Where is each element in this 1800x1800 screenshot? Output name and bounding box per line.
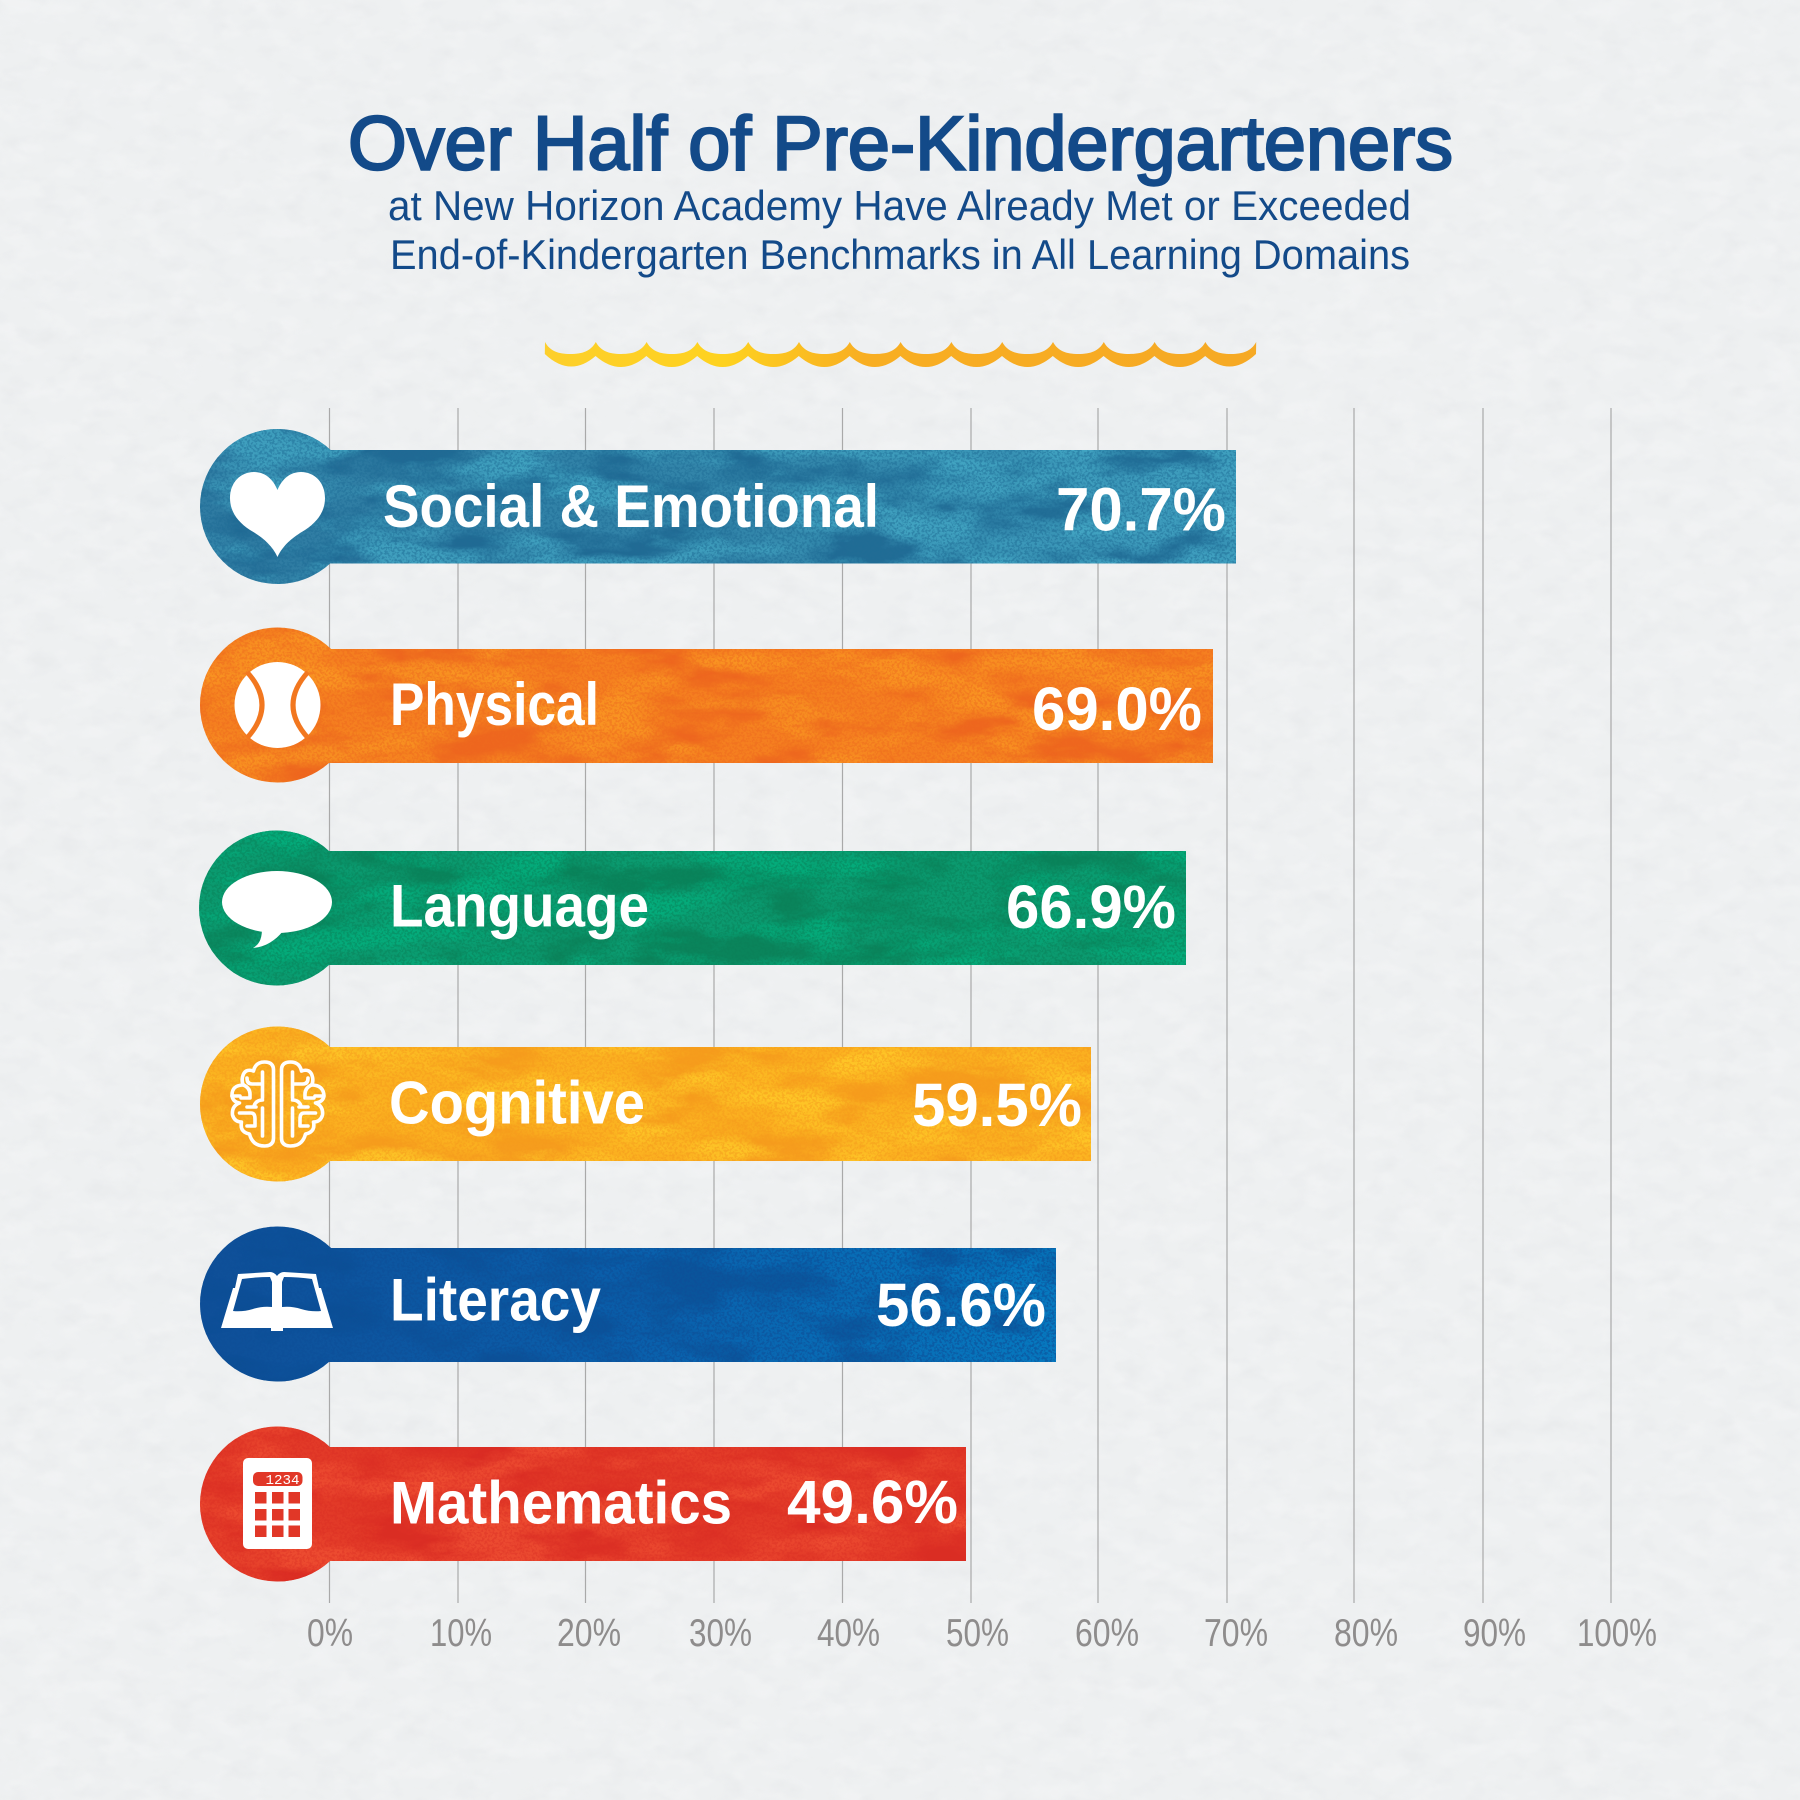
bar: Cognitive 59.5% [200,1026,1091,1182]
label: Language: Language [390,872,649,940]
x-axis labels: 30% [689,1612,752,1655]
x-axis labels: 20% [557,1612,621,1655]
x-axis labels: 90% [1463,1612,1526,1655]
value: 56.6%: 56.6% [876,1271,1046,1339]
x-axis labels: 10% [430,1612,492,1655]
bar: Social & Emotional 70.7% [190,425,1250,590]
subtitle: End-of-Kindergarten Benchmarks in All Learning Domains [390,231,1410,278]
bar: Mathematics 49.6% [200,1426,966,1582]
value: 70.7%: 70.7% [1056,476,1226,544]
x-axis labels: 0% [307,1612,353,1655]
x-axis labels: 60% [1075,1612,1139,1655]
label: Cognitive: Cognitive [389,1070,645,1136]
x-axis labels: 70% [1204,1612,1268,1655]
chart grid lines [330,408,1611,1603]
x-axis labels [307,1612,1657,1655]
subtitle: at New Horizon Academy Have Already Met or Exceeded [388,182,1411,229]
bar: Physical 69.0% [200,628,1213,782]
value: 66.9%: 66.9% [1006,873,1176,941]
x-axis labels: 40% [817,1612,880,1655]
value: 49.6%: 49.6% [787,1468,958,1536]
scalloped divider [545,342,1256,367]
value: 69.0%: 69.0% [1032,675,1202,743]
x-axis labels: 80% [1334,1612,1398,1655]
x-axis labels: 100% [1577,1612,1657,1655]
bar: Literacy 56.6% [200,1226,1056,1382]
icon: ball [234,662,320,748]
icon: calculator [243,1458,312,1549]
label: Mathematics: Mathematics [390,1470,732,1536]
icon: heart [230,472,325,557]
icon: speech bubble [222,871,332,948]
bar: Language 66.9% [199,830,1186,986]
label: Physical: Physical [390,671,599,738]
subtitle [388,182,1411,278]
icon: open book [221,1272,333,1331]
x-axis labels: 50% [946,1612,1009,1655]
label: Social & Emotional: Social & Emotional [383,473,879,540]
value: 59.5%: 59.5% [912,1071,1082,1139]
label: Literacy: Literacy [390,1266,602,1334]
icon: calculator: 1234 [266,1473,300,1489]
title: Over Half of Pre-Kindergarteners [348,102,1453,186]
icon: brain [232,1062,324,1146]
